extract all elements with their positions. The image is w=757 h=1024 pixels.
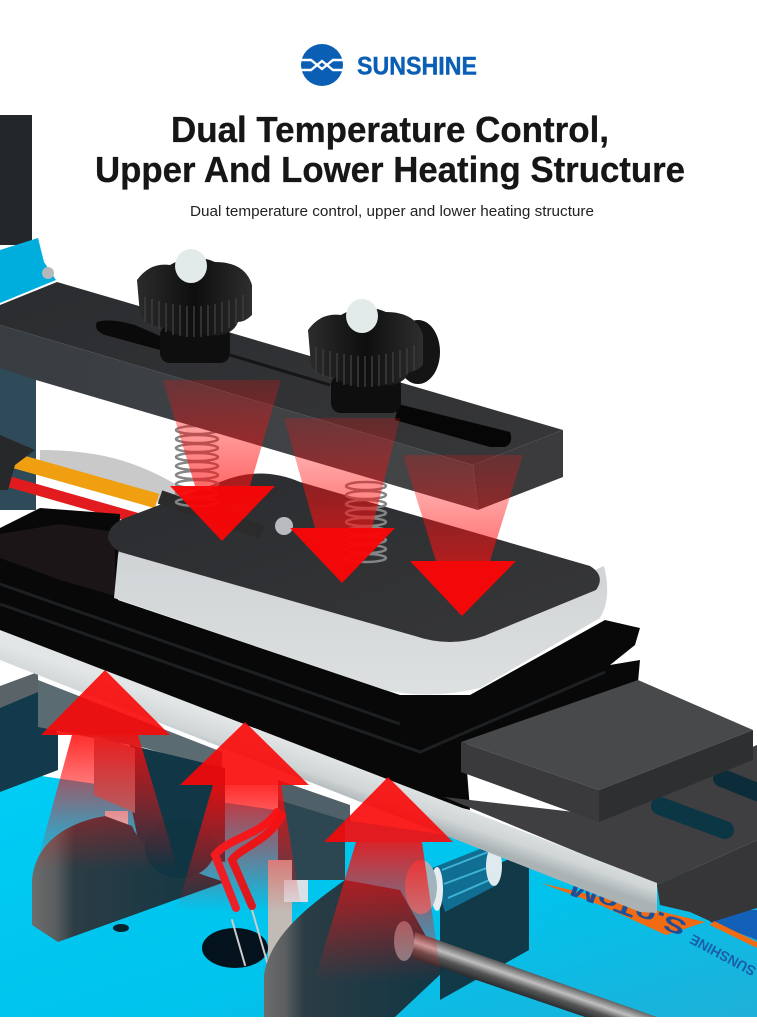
heat arrow: lower middle	[176, 722, 309, 912]
slot: far right	[722, 778, 757, 792]
cables	[10, 460, 175, 522]
heat arrow: upper left	[163, 380, 281, 541]
logo emblem	[301, 44, 343, 86]
orange product label: SUNSHINE	[687, 931, 757, 979]
title	[95, 109, 685, 190]
black heatsink	[0, 508, 640, 810]
foot: right	[264, 880, 445, 1017]
knurled pulley	[405, 845, 502, 914]
cyan base plate	[0, 770, 757, 1017]
slider block	[461, 680, 753, 822]
brand logo	[301, 44, 477, 86]
springs	[176, 426, 386, 562]
post: middle	[268, 860, 308, 970]
cable sheath	[0, 435, 35, 490]
small screw hole	[113, 924, 129, 932]
lever rod	[394, 921, 657, 1017]
logo wordmark: SUNSHINE	[357, 52, 477, 80]
right support block	[440, 850, 529, 1000]
heat arrow: lower left	[35, 670, 178, 870]
orange product label	[541, 876, 757, 979]
silver rail	[0, 630, 657, 913]
upper heating plate	[108, 474, 607, 695]
body: left support	[130, 745, 225, 862]
support block: middle	[278, 785, 345, 880]
knob: left	[137, 249, 252, 363]
upper arm	[0, 282, 563, 510]
stem: left post	[94, 735, 135, 829]
slider end face	[657, 840, 757, 922]
left lower block	[0, 672, 58, 792]
heater leads	[215, 812, 282, 965]
title: Upper And Lower Heating Structure	[95, 149, 685, 190]
support block: left	[38, 680, 222, 770]
rear column	[0, 115, 36, 510]
foot: left	[32, 816, 225, 942]
subtitle: Dual temperature control, upper and lower heating structure	[190, 204, 594, 220]
mount hole	[202, 928, 268, 968]
heat-shrink cable end	[160, 497, 262, 532]
lower end plate	[444, 745, 757, 885]
orange product label: S.oToM	[567, 876, 690, 941]
bottom white strip	[0, 1017, 757, 1024]
heat arrow: lower right	[314, 777, 453, 982]
gray cap: middle support	[278, 780, 350, 822]
heat arrow: upper right	[403, 455, 523, 616]
slot: lower plate	[660, 806, 725, 830]
knob: right	[308, 299, 440, 413]
heat arrow: upper middle	[284, 418, 400, 583]
title: Dual Temperature Control,	[171, 109, 609, 150]
blue bracket	[0, 238, 56, 303]
disc: left foot	[145, 818, 215, 878]
